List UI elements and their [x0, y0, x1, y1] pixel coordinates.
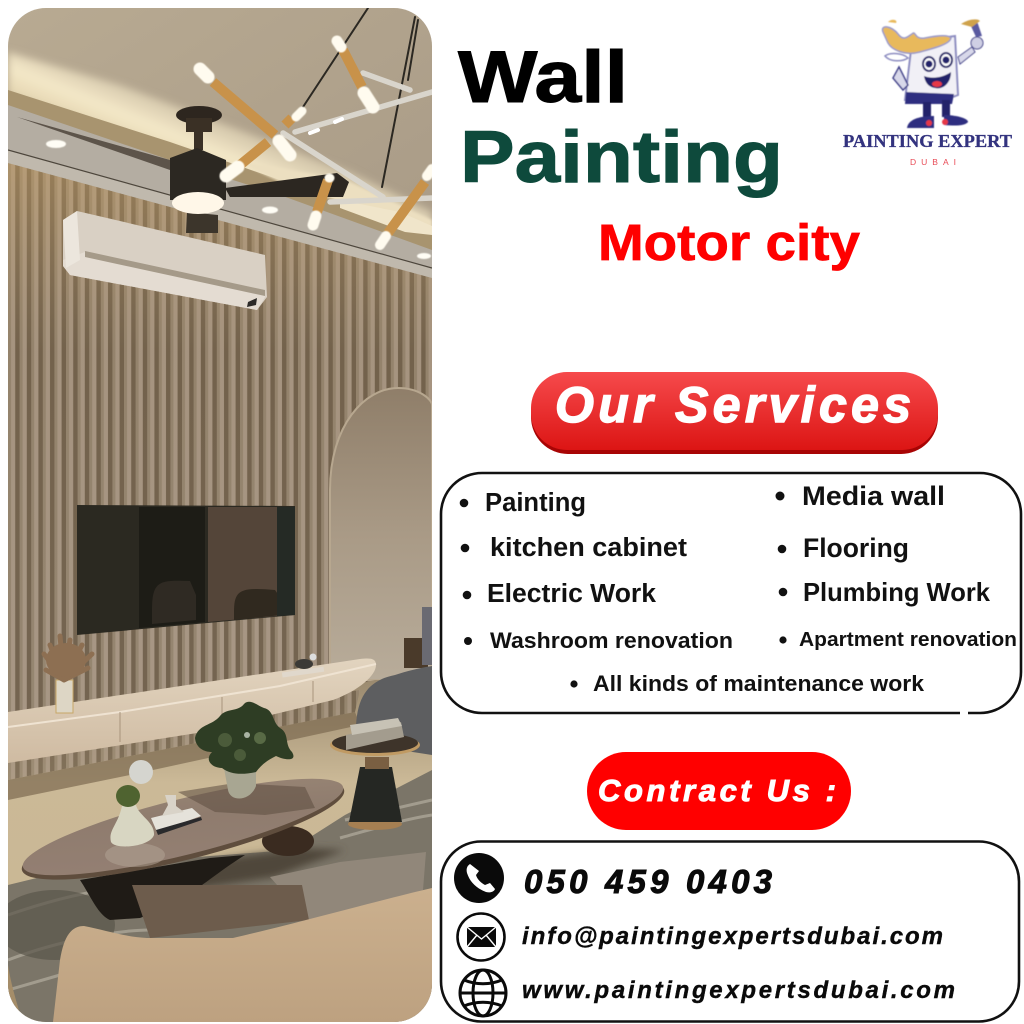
logo wordmark: PAINTING EXPERT: [843, 131, 1012, 151]
media console: [8, 654, 376, 763]
service: Painting: Painting: [485, 489, 586, 517]
slat shadows under console: [8, 690, 360, 780]
side table: [330, 718, 420, 830]
panel: contact details: [441, 842, 1019, 1022]
icon: envelope: [458, 914, 504, 960]
logo: Painting Expert Dubai: [843, 19, 1012, 167]
gray cushion: [270, 852, 426, 920]
chandelier: [200, 8, 432, 245]
icon: globe: [460, 970, 506, 1016]
coffee table top: [22, 778, 344, 880]
heading button: Our Services: [531, 372, 938, 454]
service: Apartment renovation: Apartment renovation: [799, 629, 1017, 651]
armchair behind: [404, 607, 432, 668]
service: All kinds of maintenance work: All kinds of maintenance work: [593, 671, 925, 696]
icon: phone: [454, 853, 504, 903]
service: Flooring: Flooring: [803, 533, 909, 563]
logo mascot: [883, 19, 983, 128]
cove light band: [8, 52, 432, 268]
panel: services list: [441, 473, 1021, 717]
rug: [8, 770, 432, 1022]
television: [77, 505, 295, 635]
service: kitchen cabinet: kitchen cabinet: [490, 534, 688, 562]
plant in vase: [195, 702, 293, 799]
title: Wall: Wall: [458, 37, 628, 118]
ceiling spotlights: [46, 140, 431, 259]
air conditioner: [63, 211, 267, 310]
ottoman: [356, 666, 432, 755]
tray and glass: [151, 795, 202, 835]
floor: [8, 680, 432, 1022]
heading button: Contract Us: Contract Us :: [598, 773, 836, 808]
service: Electric Work: Electric Work: [487, 580, 657, 608]
table vase ornament: [110, 760, 154, 846]
service: Media wall: Media wall: [802, 481, 945, 511]
heading button: Our Services: Our Services: [555, 377, 911, 433]
email address: info@paintingexpertsdubai.com: [522, 923, 943, 950]
title: Painting: Painting: [460, 117, 783, 198]
phone number: 050 459 0403: [524, 863, 772, 900]
service: Washroom renovation: Washroom renovation: [490, 628, 733, 653]
ceiling fan: [17, 106, 349, 233]
ribbed wall: [8, 149, 432, 712]
ceiling: [8, 8, 432, 288]
heading button: Contract Us: [587, 752, 851, 830]
website address: www.paintingexpertsdubai.com: [522, 977, 955, 1004]
brown cushion: [132, 885, 309, 938]
logo sub-wordmark: DUBAI: [910, 157, 956, 167]
dried flower vase: [44, 636, 92, 713]
sofa: [53, 888, 432, 1022]
wall arch: [330, 388, 432, 680]
panel: interior photo: [0, 8, 432, 1022]
service: Plumbing Work: Plumbing Work: [803, 577, 991, 607]
subtitle: Motor city: Motor city: [598, 214, 861, 271]
table base: [80, 826, 345, 920]
